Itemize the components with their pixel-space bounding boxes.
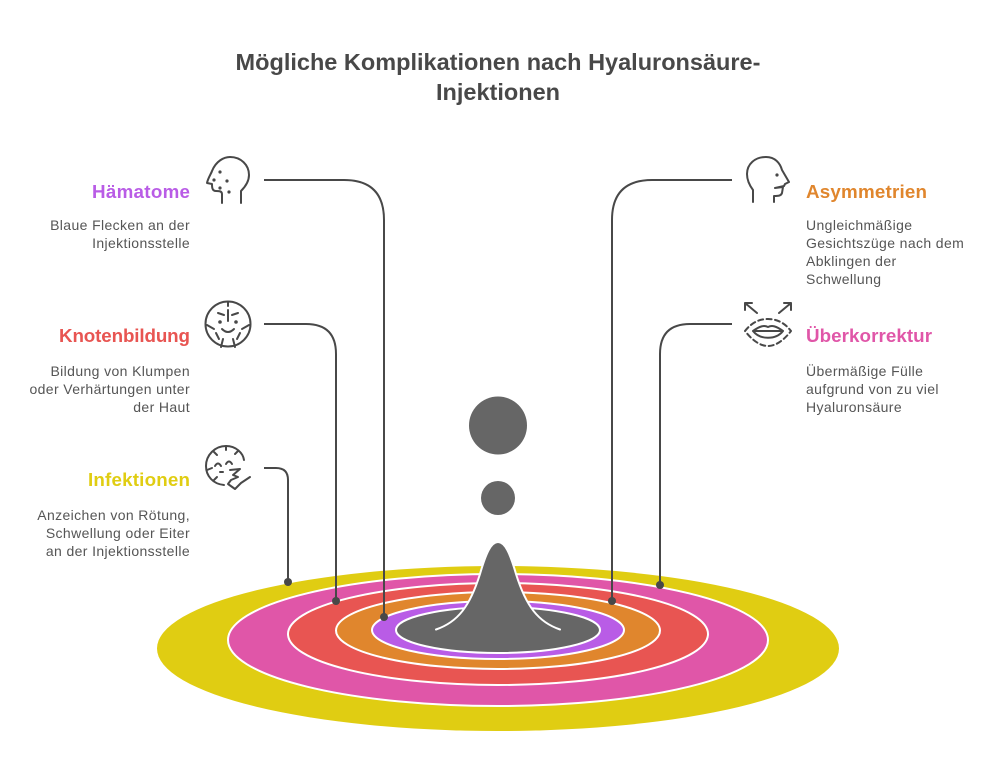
description: Injektionsstelle xyxy=(92,235,190,251)
description xyxy=(50,217,190,251)
description: Schwellung xyxy=(806,271,881,287)
ring: pink xyxy=(228,574,768,706)
ring: red xyxy=(288,583,708,685)
panel: Knotenbildung xyxy=(29,302,250,415)
description: Ungleichmäßige xyxy=(806,217,912,233)
panel: Asymmetrien xyxy=(747,157,964,287)
description: Blaue Flecken an der xyxy=(50,217,190,233)
ring: purple xyxy=(372,601,624,659)
title xyxy=(236,49,760,105)
description xyxy=(806,217,964,287)
icon: lips with arrows xyxy=(745,303,791,346)
ring: orange xyxy=(336,592,660,669)
icon: head with spots xyxy=(207,157,249,203)
connector: Infektionen xyxy=(264,468,292,586)
icon: head profile xyxy=(747,157,789,202)
description: an der Injektionsstelle xyxy=(46,543,190,559)
description: aufgrund von zu viel xyxy=(806,381,939,397)
description xyxy=(29,363,190,415)
droplet peak xyxy=(436,542,560,630)
panel: Infektionen xyxy=(37,446,250,559)
heading: Knotenbildung xyxy=(59,325,190,346)
ring: gray center xyxy=(396,607,600,653)
connector: Hämatome xyxy=(264,180,388,621)
title: Injektionen xyxy=(436,79,560,105)
ripple diagram xyxy=(157,396,839,731)
description: Schwellung oder Eiter xyxy=(46,525,190,541)
description: Abklingen der xyxy=(806,253,897,269)
connector: Knotenbildung xyxy=(264,324,340,605)
description: Bildung von Klumpen xyxy=(50,363,190,379)
droplet small xyxy=(481,481,515,515)
description: der Haut xyxy=(133,399,190,415)
heading: Überkorrektur xyxy=(806,325,933,346)
panel: Hämatome xyxy=(50,157,249,251)
description xyxy=(37,507,190,559)
title: Mögliche Komplikationen nach Hyaluronsäure- xyxy=(236,49,760,75)
heading: Infektionen xyxy=(88,469,190,490)
heading: Hämatome xyxy=(92,181,190,202)
description: Anzeichen von Rötung, xyxy=(37,507,190,523)
description: Hyaluronsäure xyxy=(806,399,902,415)
icon: face with infected area xyxy=(206,446,250,489)
icon: face with nodules xyxy=(206,302,250,347)
ring: yellow xyxy=(157,566,839,731)
connector: Überkorrektur xyxy=(656,324,732,589)
connector: Asymmetrien xyxy=(608,180,732,605)
description: Gesichtszüge nach dem xyxy=(806,235,964,251)
description: oder Verhärtungen unter xyxy=(29,381,190,397)
heading: Asymmetrien xyxy=(806,181,927,202)
description: Übermäßige Fülle xyxy=(806,362,923,379)
droplet large xyxy=(469,396,527,454)
description xyxy=(806,362,939,415)
panel: Überkorrektur xyxy=(745,303,939,415)
